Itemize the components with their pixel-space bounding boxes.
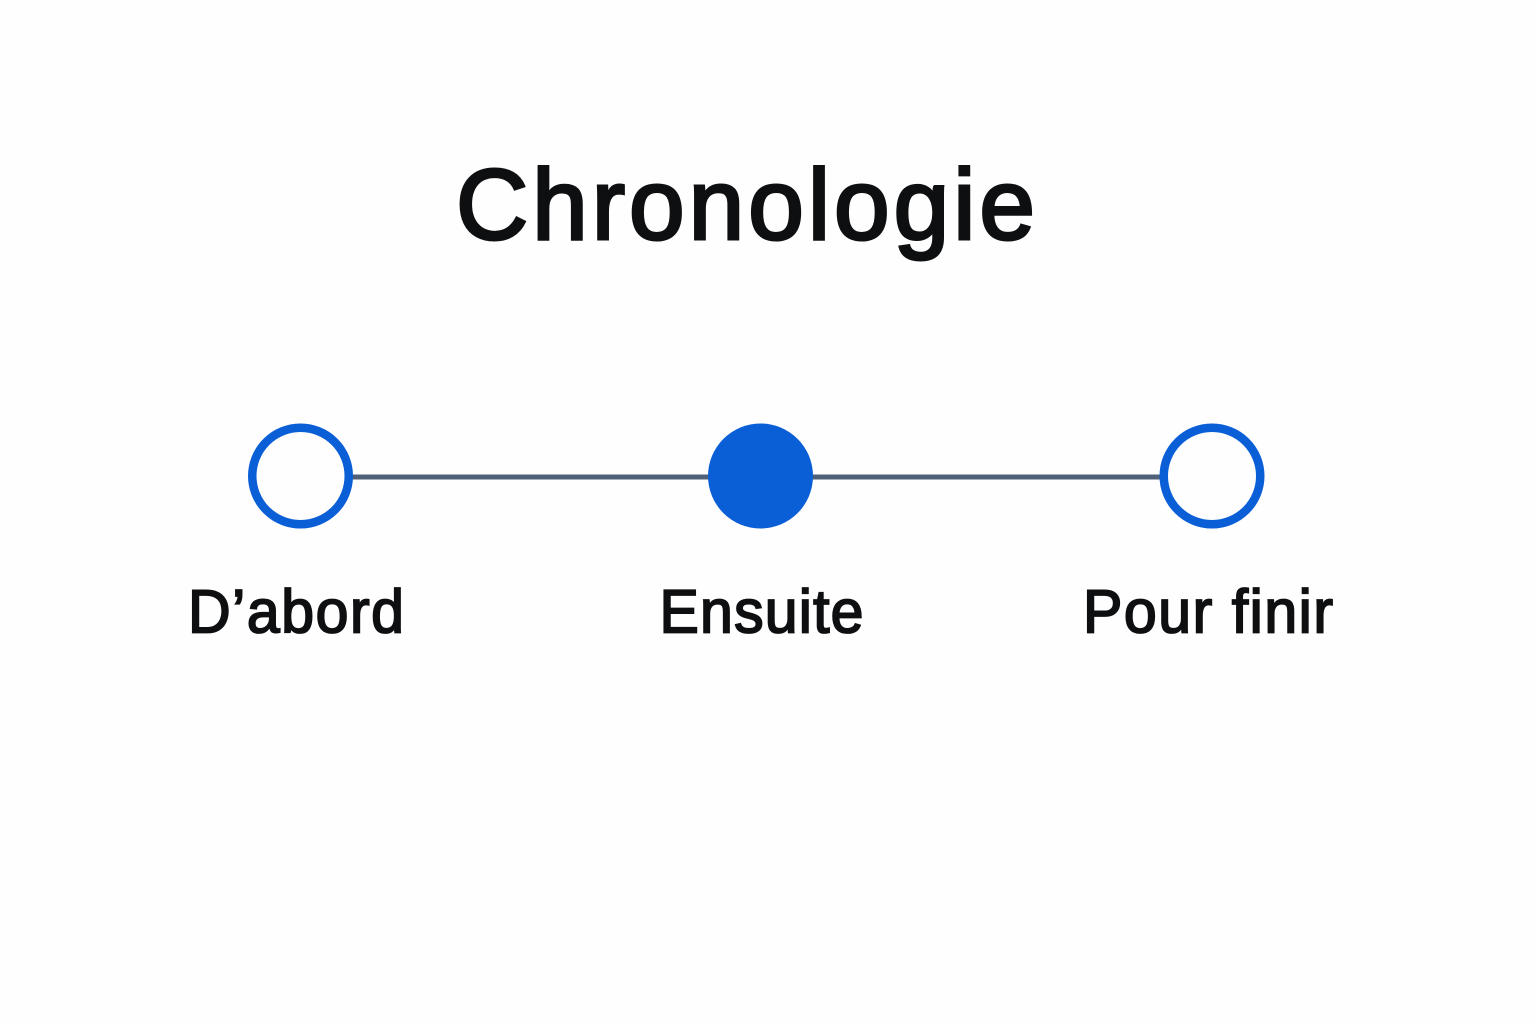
marker: Pour finir (1164, 428, 1260, 524)
marker: Ensuite (708, 424, 813, 528)
label: Pour finir: Pour finir (1083, 578, 1333, 646)
label: D'abord: D’abord (188, 578, 404, 646)
connector line: second segment (810, 474, 1164, 480)
label: Ensuite: Ensuite (660, 578, 864, 646)
connector line: first segment (350, 474, 712, 480)
marker: D'abord (252, 428, 349, 524)
timeline (252, 424, 1260, 528)
title: Chronologie (456, 149, 1035, 261)
